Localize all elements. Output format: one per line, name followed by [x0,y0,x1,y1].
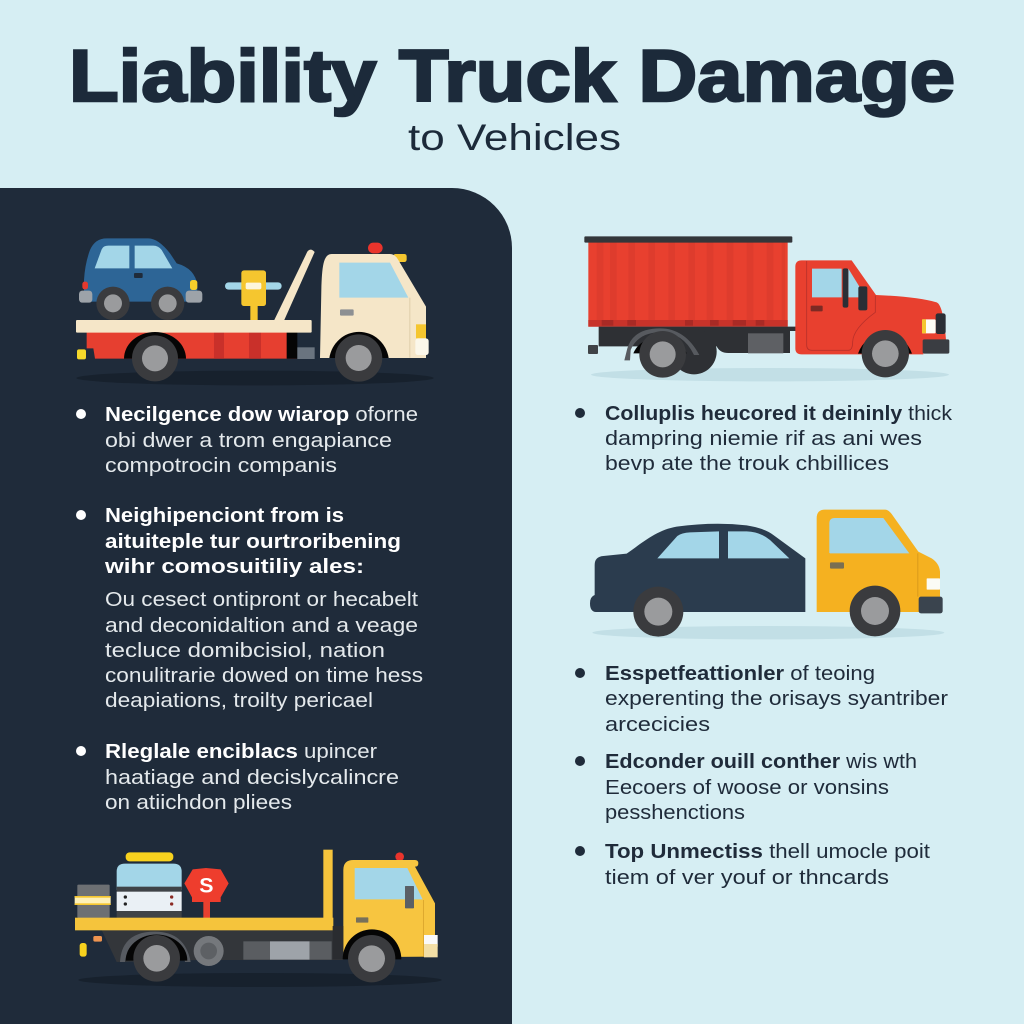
bullet list: right top: Colluplis heucored it deininly thick [605,402,953,425]
bullet list: right bottom [575,840,930,889]
icon: dark car with yellow truck cab [590,510,944,639]
bullet list: right middle: experenting the orisays syantriber [605,687,948,710]
bullet list: left bottom: on atiichdon pliees [105,791,292,814]
bullet list: left middle: Ou cesect ontipront or hecabelt [105,588,418,611]
icon: yellow flatbed truck with cargo and dollar sign: S [199,873,213,897]
bullet list: right top [575,402,953,475]
bullet list: right top: bevp ate the trouk chbillices [605,452,889,475]
subtitle: to Vehicles [408,117,621,158]
bullet list: left top: Necilgence dow wiarop oforne [105,403,418,426]
bullet list: left bottom: Rleglale enciblacs upincer [105,740,377,763]
bullet list: right middle: arcecicies [605,713,710,736]
bullet list: right middle [575,662,948,736]
icon: yellow flatbed truck with cargo and dollar sign [75,850,442,987]
panel: dark left column [0,188,512,1024]
bullet list: left top [76,403,418,477]
icon: red box truck [584,236,949,381]
bullet list: left middle: aituiteple tur ourtroribening [105,530,401,553]
title: Liability Truck Damage [69,36,955,117]
bullet list: right lower: Edconder ouill conther wis wth [605,750,917,773]
bullet list: left middle [76,504,423,712]
bullet list: left top: compotrocin companis [105,454,337,477]
bullet list: left middle: Neighipenciont from is [105,504,344,527]
bullet list: left middle: tecluce domibcisiol, nation [105,639,385,662]
bullet list: left middle: conulitrarie dowed on time hess [105,664,423,687]
bullet list: left top: obi dwer a trom engapiance [105,429,392,452]
bullet list: right middle: Esspetfeattionler of teoing [605,662,875,685]
bullet list: right lower: pesshenctions [605,801,745,824]
bullet list: right bottom: tiem of ver youf or thncards [605,866,889,889]
bullet list: right bottom: Top Unmectiss thell umocle poit [605,840,930,863]
bullet list: left middle: wihr comosuitiliy ales: [104,555,364,578]
bullet list: right lower: Eecoers of woose or vonsins [605,776,889,799]
bullet list: left middle: and deconidaltion and a veage [105,614,418,637]
bullet list: left bottom [76,740,399,814]
icon: flatbed tow truck carrying blue car [76,238,434,385]
bullet list: right top: dampring niemie rif as ani wes [605,427,922,450]
bullet list: right lower [575,750,917,824]
bullet list: left bottom: haatiage and decislycalincre [105,766,399,789]
bullet list: left middle: deapiations, troilty pericael [105,689,373,712]
